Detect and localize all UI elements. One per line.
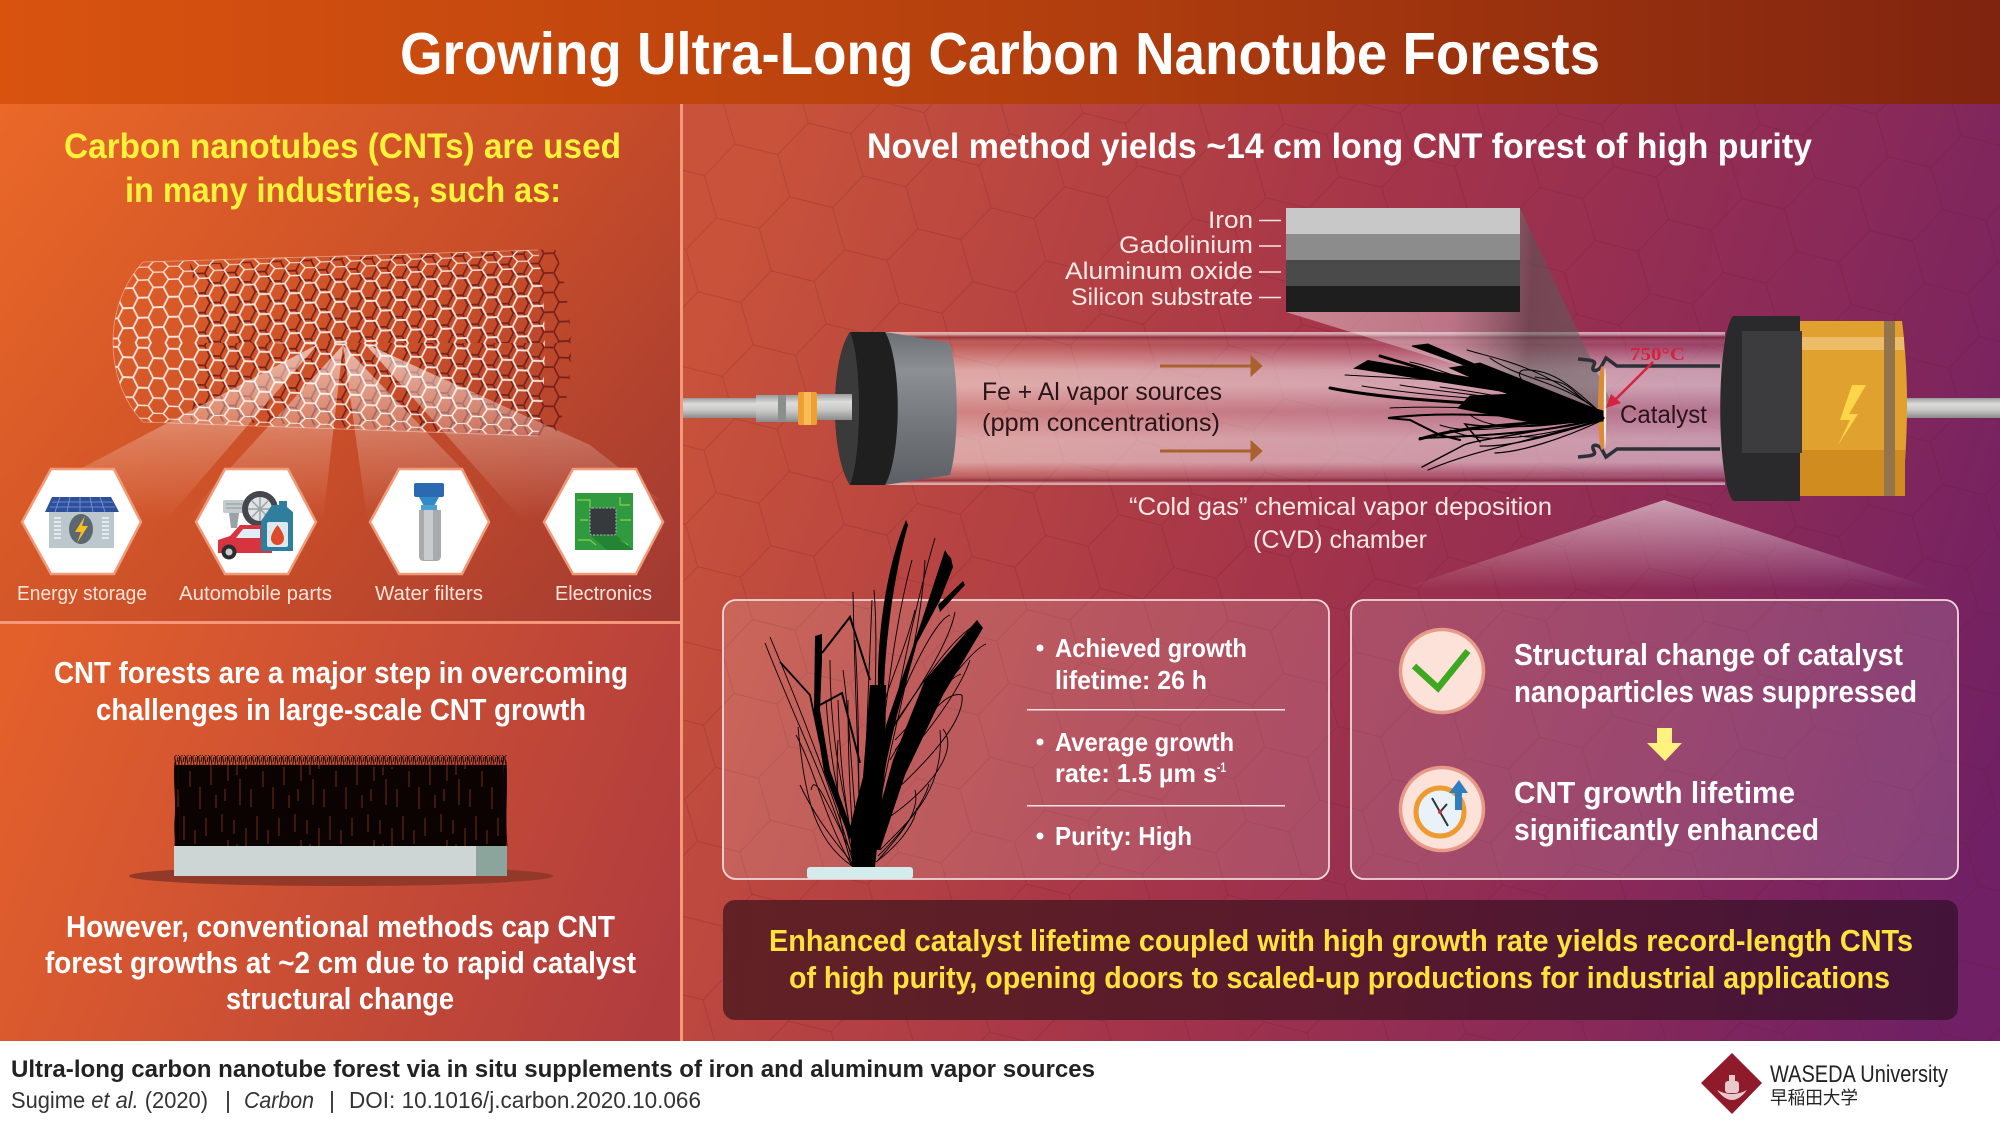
icon: clock <box>1400 768 1484 850</box>
icon: energy storage <box>22 469 141 574</box>
arrow: down <box>1647 728 1682 761</box>
catalyst holder <box>1578 358 1720 457</box>
logo: Waseda University <box>1701 1053 1948 1114</box>
layer labels: Aluminum oxide <box>1065 258 1253 285</box>
citation: reference: Sugime et al. (2020) <box>11 1087 208 1113</box>
labels: industries <box>17 583 652 605</box>
right furnace cap <box>1720 316 1907 501</box>
right pipe <box>1905 398 2000 418</box>
text: structural change: Structural change of catalyst <box>1514 637 1903 672</box>
icon: water filter <box>370 469 489 574</box>
header banner <box>0 0 2000 104</box>
CVD chamber diagram <box>683 208 2000 501</box>
chamber caption <box>1129 493 1552 554</box>
callout: conclusion: Enhanced catalyst lifetime coupled with high growth rate yields record-length CNTs <box>769 923 1913 958</box>
panel: CNT forests challenges <box>0 622 680 1041</box>
chamber caption: “Cold gas” chemical vapor deposition <box>1129 493 1552 521</box>
quartz tube <box>880 332 1725 485</box>
text: CNT forests: CNT forests are a major step in overcoming <box>54 655 628 690</box>
icon: electronics <box>544 469 663 574</box>
bullet list: results: Achieved growth <box>1055 633 1247 663</box>
citation: paper title: Ultra-long carbon nanotube forest via in situ supplements of iron and aluminum vapor sources <box>11 1056 1095 1083</box>
text: structural change <box>1514 637 1917 709</box>
callout: conclusion <box>723 900 1958 1020</box>
layer labels: Silicon substrate <box>1071 284 1253 311</box>
bullet list: results: -1 <box>1217 759 1226 775</box>
illustration: long CNT bundle <box>765 520 986 879</box>
citation: reference: Carbon <box>244 1087 314 1113</box>
labels: industries: Energy storage <box>17 583 147 605</box>
carbon nanotube illustration <box>112 249 571 436</box>
citation: reference: | <box>225 1087 231 1113</box>
panel: mechanism <box>1351 600 1958 879</box>
text: catalyst: Catalyst <box>1620 401 1707 429</box>
text: conventional methods: structural change <box>226 981 454 1016</box>
illustration: CNT forest on substrate <box>129 755 553 886</box>
heading: novel method: Novel method yields ~14 cm long CNT forest of high purity <box>867 127 1813 166</box>
CNT bundle in chamber <box>1330 344 1603 470</box>
icon: check mark <box>1400 630 1484 712</box>
heading: CNT uses: in many industries, such as: <box>125 171 561 210</box>
citation: reference <box>11 1087 701 1113</box>
panel: growth results <box>723 520 1329 879</box>
title: Growing Ultra-Long Carbon Nanotube Forests <box>400 21 1600 87</box>
temperature label and arrow <box>1606 344 1685 408</box>
labels: industries: Electronics <box>555 583 652 605</box>
zoom triangle <box>1401 500 1935 589</box>
icon: lightning bolt <box>1838 385 1866 445</box>
chamber caption: (CVD) chamber <box>1253 526 1427 554</box>
text: vapor sources: (ppm concentrations) <box>982 409 1220 437</box>
text: conventional methods: However, conventional methods cap CNT <box>66 909 615 944</box>
bullet list: results: lifetime: 26 h <box>1055 665 1207 695</box>
text: conventional methods: forest growths at ~2 cm due to rapid catalyst <box>45 945 636 980</box>
heading: CNT uses: Carbon nanotubes (CNTs) are used <box>64 127 621 166</box>
bullet list: results <box>1027 633 1285 851</box>
text: vapor sources <box>982 378 1222 437</box>
panel: CNT uses <box>0 104 680 622</box>
text: CNT forests <box>54 655 628 727</box>
bullet list: results: Purity: High <box>1055 821 1192 851</box>
panel: novel method <box>683 104 2000 1041</box>
layer labels: Gadolinium <box>1119 232 1253 259</box>
gas flow arrows <box>1160 356 1262 461</box>
icon: automobile parts <box>196 469 316 574</box>
temperature label and arrow: 750°C <box>1630 344 1685 364</box>
citation: reference: | <box>329 1087 335 1113</box>
logo: Waseda University: WASEDA University <box>1770 1061 1948 1088</box>
layer labels: Iron <box>1208 207 1253 234</box>
catalyst layer stack <box>1065 207 1520 312</box>
text: growth lifetime <box>1514 775 1819 847</box>
zoom cone to catalyst <box>1286 208 1612 410</box>
text: CNT forests: challenges in large-scale CNT growth <box>96 692 586 727</box>
bullet list: results: Average growth <box>1055 727 1234 757</box>
layer labels <box>1065 207 1281 311</box>
left end cap <box>817 332 957 485</box>
text: growth lifetime: CNT growth lifetime <box>1514 775 1795 810</box>
logo: Waseda University: 早稲田大学 <box>1770 1088 1858 1108</box>
text: vapor sources: Fe + Al vapor sources <box>982 378 1222 406</box>
text: growth lifetime: significantly enhanced <box>1514 812 1819 847</box>
light rays to industries <box>40 343 660 556</box>
labels: industries: Automobile parts <box>179 583 332 605</box>
text: structural change: nanoparticles was suppressed <box>1514 674 1917 709</box>
callout: conclusion: of high purity, opening doors to scaled-up productions for industrial applications <box>789 960 1890 995</box>
footer <box>0 1041 2000 1125</box>
left gas pipe <box>683 392 817 425</box>
citation: reference: DOI: 10.1016/j.carbon.2020.10.066 <box>349 1087 701 1113</box>
text: conventional methods <box>45 909 636 1016</box>
catalyst disc <box>1598 366 1606 450</box>
heading: CNT uses <box>64 127 621 210</box>
bullet list: results: rate: 1.5 µm s <box>1055 758 1217 788</box>
labels: industries: Water filters <box>375 583 483 605</box>
